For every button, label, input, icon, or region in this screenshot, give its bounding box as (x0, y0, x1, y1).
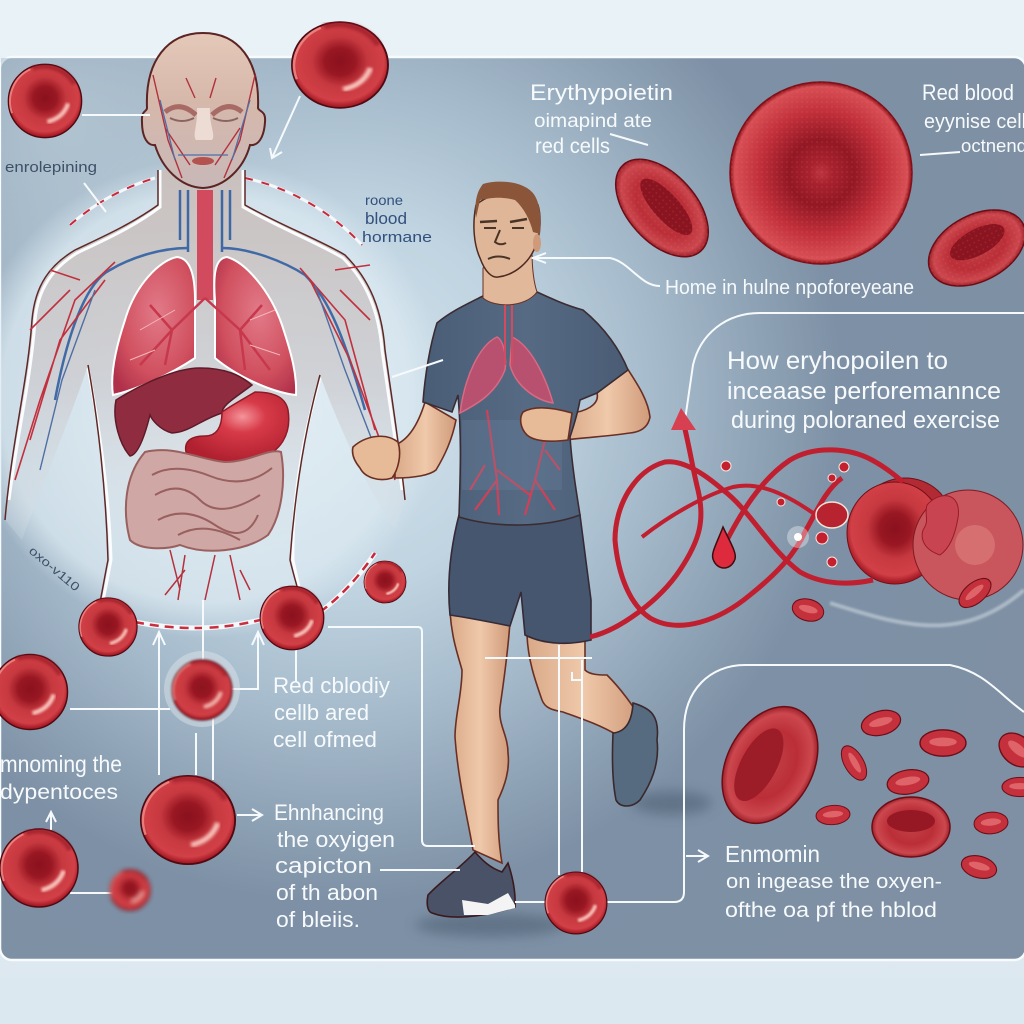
callout heading: performance (727, 347, 1001, 434)
front shoe (427, 852, 515, 917)
liver (115, 368, 252, 456)
shirt (423, 292, 628, 525)
bottom right callout (703, 690, 1024, 922)
cell (847, 482, 943, 584)
cell (0, 654, 68, 730)
label: the oxyigen (277, 827, 395, 852)
small cell (816, 502, 848, 528)
front hand (521, 408, 572, 441)
label: blood hormone: blood (365, 209, 407, 228)
right red cell (916, 194, 1024, 302)
back shoe (612, 703, 658, 806)
label: ofthe oa pf the hblod (725, 899, 937, 922)
cell (872, 797, 950, 857)
label: octnend (961, 136, 1024, 156)
cell (8, 64, 82, 138)
drop (713, 527, 735, 568)
droplets (721, 461, 849, 567)
connector lines (46, 96, 1024, 902)
arrow head (671, 408, 696, 430)
abdominal vessels (470, 410, 560, 515)
callout heading: performance: during poloraned exercise (731, 407, 1000, 434)
neck (483, 250, 537, 305)
callout heading: performance: inceaase perforemannce (727, 378, 1001, 405)
callout heading: performance: How eryhopoilen to (727, 347, 948, 375)
fold (922, 496, 958, 555)
label: capicton (275, 853, 372, 878)
fist (352, 436, 400, 480)
cell (292, 22, 388, 108)
label: Home in hulne npoforeyeane (665, 277, 914, 299)
label: of th abon (276, 880, 378, 905)
cell (545, 872, 607, 934)
cell (172, 660, 232, 720)
small label: enlarging: enrolepining (5, 159, 97, 176)
halo circle (0, 158, 445, 638)
face (480, 219, 527, 222)
label: red cells (535, 135, 610, 158)
cell (79, 598, 137, 656)
stomach (186, 392, 289, 462)
top right labels (530, 80, 1024, 299)
hair (475, 182, 541, 234)
shirt lungs (460, 337, 553, 413)
strand arrow (590, 425, 701, 637)
foot shadows (415, 791, 712, 937)
shirt vessels (505, 305, 512, 365)
shoe sole (462, 893, 515, 915)
label: dypentoces (0, 781, 118, 804)
twisted blood vessel and cells (590, 408, 1024, 637)
strand centre (642, 486, 813, 537)
anatomical figure (0, 33, 445, 640)
label: Red blood (922, 80, 1014, 105)
sparkle (787, 526, 809, 548)
rotated label: oxo-v110 (26, 544, 83, 594)
trachea and vessels (15, 190, 395, 480)
left labels (0, 673, 395, 932)
tilted red cell (598, 142, 726, 274)
lungs (112, 257, 296, 395)
label: on ingease the oxyen- (726, 871, 942, 893)
cell (703, 690, 837, 840)
lower vessels (165, 550, 250, 600)
large red cell (730, 82, 912, 264)
shorts (449, 515, 591, 643)
red blood cells left (0, 22, 607, 934)
eyes (484, 228, 524, 259)
label: Ehnhancing (274, 800, 384, 825)
white wake (830, 590, 1024, 625)
intestines (126, 450, 283, 551)
cell centre (955, 525, 995, 565)
cell (260, 586, 324, 650)
back leg (527, 635, 640, 735)
glow (164, 651, 240, 727)
small cells (815, 706, 1024, 882)
cell (364, 561, 406, 603)
label: of bleiis. (276, 907, 360, 932)
loose cells (790, 595, 826, 625)
label: blood hormone: hormane (362, 229, 432, 246)
label: blood hormone: roone (365, 192, 403, 208)
torso silhouette (5, 170, 405, 640)
runner (352, 182, 712, 937)
cell (110, 870, 150, 910)
label: cellb ared (274, 700, 369, 725)
abdomen shading (462, 420, 562, 490)
head (474, 193, 540, 277)
back arm (565, 368, 650, 440)
cell (0, 829, 78, 907)
head (142, 33, 265, 188)
front leg (450, 612, 510, 863)
label: erythropoietin: Erythypoietin (530, 80, 673, 105)
strand upper (727, 450, 903, 540)
strand loop (615, 462, 873, 625)
cell (913, 490, 1023, 600)
cell (141, 776, 235, 864)
label: Enmomin (725, 841, 820, 867)
front arm (395, 402, 456, 478)
ear (533, 234, 541, 252)
label: Red cblodiy (273, 673, 390, 698)
behind cell (859, 478, 951, 562)
label: oimapind ate (534, 111, 652, 132)
loose cell (954, 573, 996, 613)
label: cell ofmed (273, 727, 377, 752)
label: mnoming the (0, 751, 122, 777)
label: blood hormone (362, 192, 432, 246)
